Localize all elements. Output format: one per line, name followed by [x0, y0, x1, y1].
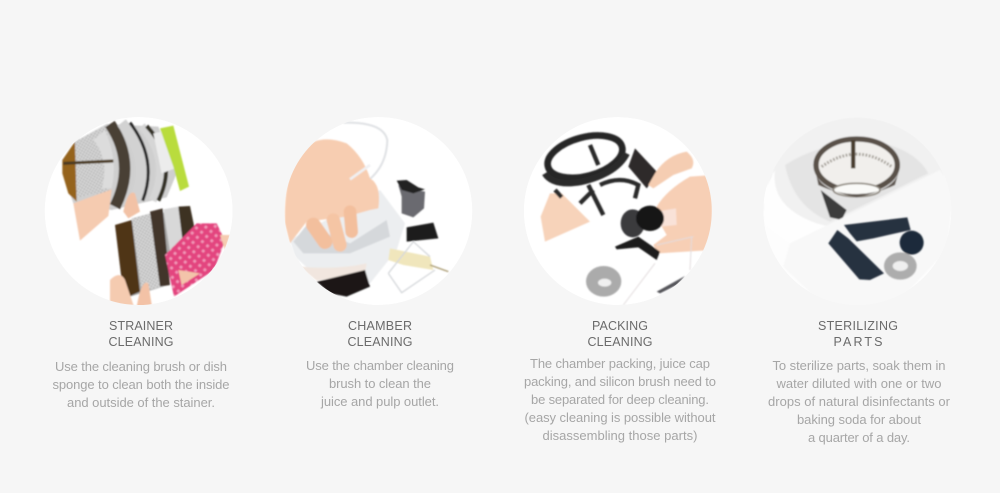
heading: packing cleaning: PACKING: [592, 319, 648, 333]
text: strainer description: sponge to clean both the inside: [52, 377, 230, 392]
text: sterilizing description: water diluted with one or two: [776, 376, 942, 391]
text: strainer description: Use the cleaning brush or dish: [55, 359, 227, 374]
text: chamber description: brush to clean the: [329, 376, 431, 391]
heading: packing cleaning: CLEANING: [588, 335, 652, 349]
heading: chamber cleaning: CHAMBER: [348, 319, 412, 333]
panel: sterilizing parts: [763, 117, 953, 445]
heading: strainer cleaning: CLEANING: [108, 335, 174, 349]
heading: sterilizing parts: STERILIZING: [818, 319, 898, 333]
text: sterilizing description: To sterilize parts, soak them in: [772, 358, 946, 373]
text: chamber description: Use the chamber cleaning: [306, 358, 454, 373]
heading: chamber cleaning: CLEANING: [348, 335, 412, 349]
heading: sterilizing parts: PARTS: [834, 335, 882, 349]
photo: strainer soaking and silicone parts: [774, 135, 928, 281]
text: packing description: packing, and silicon brush need to: [524, 374, 716, 389]
text: packing description: (easy cleaning is possible without: [524, 410, 716, 425]
text: sterilizing description: drops of natural disinfectants or: [768, 394, 951, 409]
photo: removing packing parts: [524, 117, 713, 305]
panel: packing cleaning: [524, 117, 716, 443]
text: chamber description: juice and pulp outlet.: [320, 394, 439, 409]
heading: strainer cleaning: STRAINER: [109, 319, 173, 333]
text: sterilizing description: baking soda for about: [797, 412, 921, 427]
panel: strainer cleaning: [45, 117, 233, 410]
text: packing description: be separated for deep cleaning.: [531, 392, 709, 407]
text: sterilizing description: a quarter of a day.: [808, 430, 910, 445]
text: packing description: The chamber packing, juice cap: [530, 356, 710, 371]
panel: chamber cleaning: [284, 117, 472, 409]
text: packing description: disassembling those parts): [542, 428, 698, 443]
photo: strainer and sponge in hands: [45, 117, 233, 307]
text: strainer description: and outside of the stainer.: [67, 395, 215, 410]
photo: hand holding chamber lid: [284, 117, 472, 305]
